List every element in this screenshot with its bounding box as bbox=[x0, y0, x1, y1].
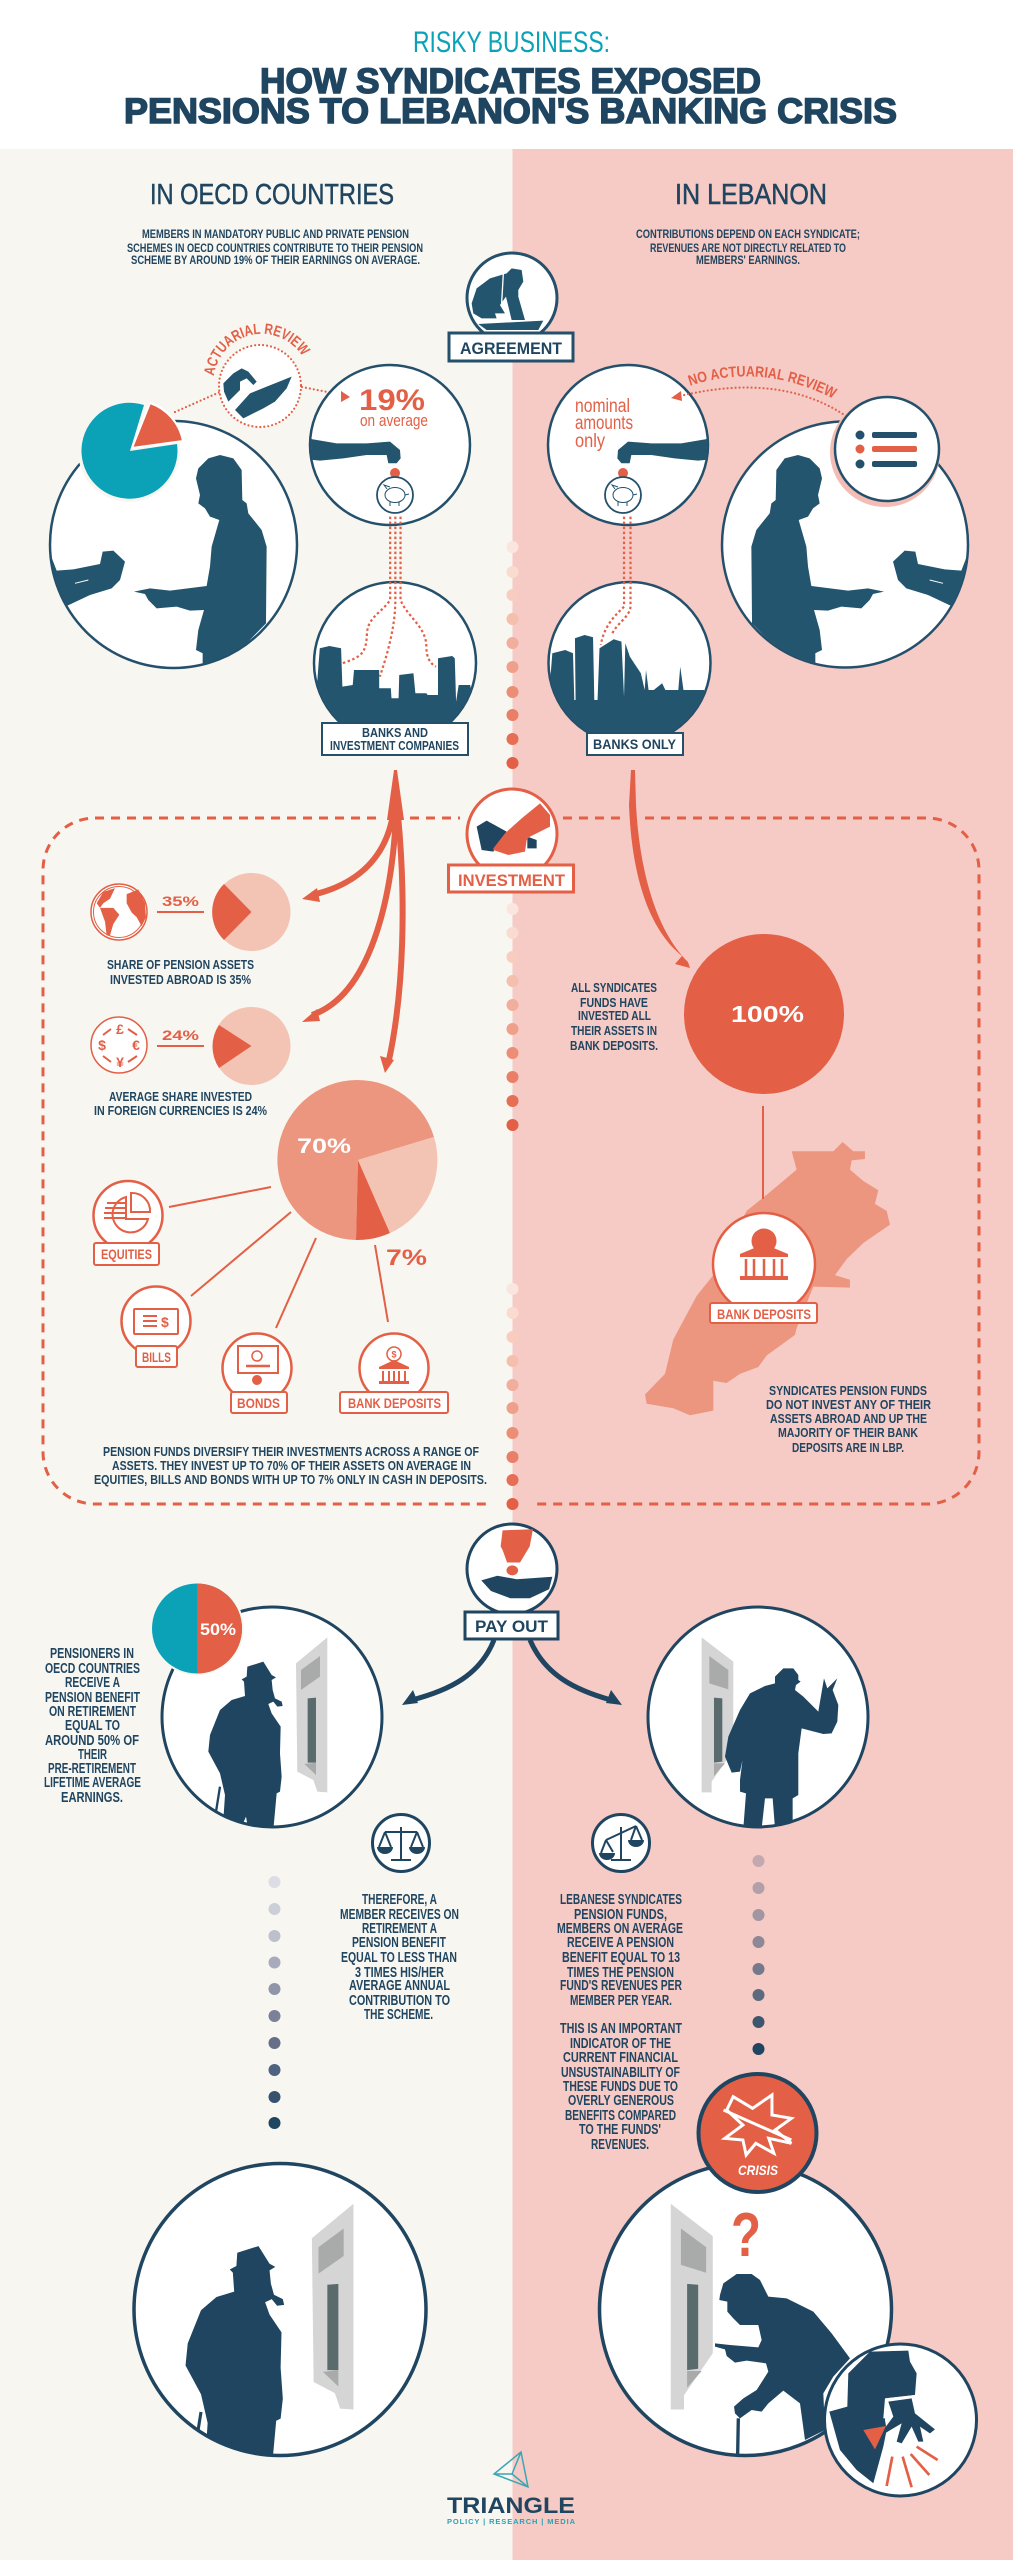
icon: crisis bbox=[698, 2074, 816, 2192]
chart: 100% circle: 100% bbox=[731, 1001, 804, 1027]
panel: OECD final pensioner bbox=[134, 2164, 426, 2469]
heading: in Lebanon: IN LEBANON bbox=[675, 179, 827, 211]
panel: nominal amounts circle: amounts bbox=[575, 413, 633, 434]
text: OECD pensioners bbox=[44, 1646, 141, 1806]
text: Lebanese syndicates: TO THE FUNDS' bbox=[579, 2122, 661, 2138]
text: Lebanese syndicates bbox=[557, 1892, 683, 2153]
panel: agreement badge bbox=[449, 253, 573, 361]
icon: globe bbox=[91, 884, 147, 940]
arrows: OECD investment flows bbox=[302, 770, 404, 1073]
text: Lebanese syndicates: UNSUSTAINABILITY OF bbox=[561, 2065, 680, 2081]
text: OECD contributions bbox=[127, 229, 423, 267]
icon: equities: EQUITIES bbox=[101, 1247, 152, 1262]
icon: empty wallet bbox=[824, 2344, 976, 2496]
logo: Triangle bbox=[447, 2452, 576, 2526]
arrow: Lebanon investment flow bbox=[629, 770, 690, 968]
text: Lebanese syndicates: MEMBERS ON AVERAGE bbox=[557, 1921, 683, 1937]
icon: checklist bbox=[830, 397, 940, 507]
panel: 19% contribution circle bbox=[307, 365, 470, 525]
chart: 50% pie bbox=[150, 1582, 244, 1676]
text: Lebanon contributions bbox=[636, 229, 860, 267]
heading: in OECD countries: IN OECD COUNTRIES bbox=[150, 179, 394, 211]
icon: bank deposits: BANK DEPOSITS bbox=[348, 1396, 441, 1411]
text: diversification: ASSETS. THEY INVEST UP TO 70% OF THEIR ASSETS ON AVERAGE IN bbox=[112, 1459, 471, 1473]
stat: 35% bbox=[157, 893, 204, 913]
text: OECD pensioners: RECEIVE A bbox=[65, 1675, 120, 1691]
title bbox=[124, 26, 897, 131]
text: Lebanese syndicates: REVENUES. bbox=[591, 2137, 649, 2153]
text: foreign currencies: AVERAGE SHARE INVESTED bbox=[109, 1090, 252, 1104]
text: OECD pensioners: OECD COUNTRIES bbox=[45, 1661, 140, 1677]
text: OECD pensioners: PENSION BENEFIT bbox=[45, 1690, 140, 1706]
icon: currencies: ¥ bbox=[116, 1054, 124, 1070]
panel: right person circle bbox=[722, 422, 971, 668]
icon: Lebanon bank deposits: BANK DEPOSITS bbox=[717, 1307, 811, 1322]
text: therefore: 3 TIMES HIS/HER bbox=[355, 1965, 444, 1981]
chart: 24% pie bbox=[212, 1007, 290, 1085]
title: HOW SYNDICATES EXPOSED bbox=[260, 62, 761, 101]
panel: banks and investment companies: BANKS AND bbox=[362, 725, 428, 740]
map: Lebanon bbox=[645, 1142, 890, 1415]
panel: actuarial review circle: ACTUARIAL REVIEW bbox=[204, 324, 311, 376]
panel: 19% contribution circle: 19% bbox=[359, 384, 425, 417]
stat: 24% bbox=[157, 1027, 204, 1047]
text: all syndicates: INVESTED ALL bbox=[578, 1009, 651, 1023]
text: OECD contributions: SCHEME BY AROUND 19% OF THEIR EARNINGS ON AVERAGE. bbox=[131, 255, 420, 267]
icon: bank deposits: $ bbox=[391, 1350, 397, 1360]
icon: currencies: £ bbox=[116, 1021, 124, 1037]
panel: nominal amounts circle: only bbox=[575, 431, 605, 452]
text: Lebanese syndicates: PENSION FUNDS, bbox=[574, 1907, 667, 1923]
text: OECD pensioners: AROUND 50% OF bbox=[45, 1733, 139, 1749]
text: Lebanon contributions: REVENUES ARE NOT DIRECTLY RELATED TO bbox=[650, 243, 846, 255]
text: Lebanese syndicates: RECEIVE A PENSION bbox=[567, 1935, 674, 1951]
title: PENSIONS TO LEBANON'S BANKING CRISIS bbox=[124, 92, 897, 131]
icon: currencies: € bbox=[132, 1037, 140, 1053]
panel: nominal amounts circle: nominal bbox=[575, 396, 630, 417]
text: syndicates pension funds: DO NOT INVEST ANY OF THEIR bbox=[766, 1398, 931, 1412]
text: OECD pensioners: THEIR bbox=[78, 1747, 107, 1763]
dots: Lebanon timeline bbox=[752, 1855, 764, 2055]
text: all syndicates: FUNDS HAVE bbox=[580, 996, 648, 1010]
text: Lebanese syndicates: CURRENT FINANCIAL bbox=[563, 2050, 678, 2066]
arrows: pay out bbox=[402, 1640, 622, 1705]
panel: investment badge bbox=[448, 789, 574, 892]
icon: Lebanon bank deposits bbox=[710, 1213, 817, 1323]
text: Lebanese syndicates: OVERLY GENEROUS bbox=[568, 2093, 674, 2109]
panel: actuarial review circle bbox=[174, 324, 330, 428]
text: share abroad: SHARE OF PENSION ASSETS bbox=[107, 958, 254, 972]
arrow: no actuarial review bbox=[671, 366, 844, 415]
text: therefore bbox=[340, 1892, 459, 2023]
text: OECD contributions: MEMBERS IN MANDATORY PUBLIC AND PRIVATE PENSION bbox=[142, 229, 409, 241]
panel: pay out badge bbox=[465, 1524, 558, 1639]
text: Lebanese syndicates: BENEFITS COMPARED bbox=[565, 2108, 676, 2124]
text: diversification bbox=[94, 1445, 487, 1487]
chart: 50% pie: 50% bbox=[200, 1620, 236, 1639]
text: Lebanon contributions: MEMBERS' EARNINGS. bbox=[696, 255, 800, 267]
text: foreign currencies: IN FOREIGN CURRENCIES IS 24% bbox=[94, 1104, 267, 1118]
panel: banks only bbox=[546, 517, 714, 755]
title: RISKY BUSINESS: bbox=[413, 26, 610, 59]
chart: actuarial pie bbox=[78, 400, 183, 502]
text: all syndicates: BANK DEPOSITS. bbox=[570, 1039, 658, 1053]
panel: banks only: BANKS ONLY bbox=[593, 736, 677, 752]
text: diversification: EQUITIES, BILLS AND BONDS WITH UP TO 7% ONLY IN CASH IN DEPOSITS. bbox=[94, 1473, 487, 1487]
panel: banks and investment companies bbox=[313, 517, 476, 755]
panel: investment badge: INVESTMENT bbox=[458, 871, 566, 890]
text: Lebanese syndicates: TIMES THE PENSION bbox=[567, 1965, 674, 1981]
icon: bills bbox=[122, 1286, 190, 1367]
text: therefore: MEMBER RECEIVES ON bbox=[340, 1907, 459, 1923]
panel: left person circle bbox=[47, 421, 297, 668]
text: Lebanese syndicates: BENEFIT EQUAL TO 13 bbox=[562, 1950, 680, 1966]
chart: OECD asset allocation pie: 70% bbox=[297, 1135, 351, 1158]
panel: Lebanon final pensioner: ? bbox=[731, 2201, 761, 2270]
icon: currencies bbox=[91, 1017, 147, 1073]
text: share abroad bbox=[107, 958, 254, 987]
chart: 35% pie bbox=[212, 873, 290, 951]
text: Lebanon contributions: CONTRIBUTIONS DEPEND ON EACH SYNDICATE; bbox=[636, 229, 860, 241]
text: Lebanese syndicates: INDICATOR OF THE bbox=[570, 2036, 671, 2052]
text: therefore: RETIREMENT A bbox=[362, 1921, 437, 1937]
icon: equities bbox=[94, 1181, 162, 1265]
text: Lebanese syndicates: THESE FUNDS DUE TO bbox=[563, 2079, 678, 2095]
icon: bills: $ bbox=[161, 1314, 169, 1330]
icon: bonds: BONDS bbox=[237, 1396, 280, 1411]
text: syndicates pension funds: DEPOSITS ARE IN LBP. bbox=[792, 1441, 904, 1455]
chart: OECD asset allocation pie bbox=[277, 1080, 437, 1270]
text: OECD contributions: SCHEMES IN OECD COUNTRIES CONTRIBUTE TO THEIR PENSION bbox=[127, 243, 423, 255]
text: therefore: PENSION BENEFIT bbox=[352, 1935, 446, 1951]
icon: crisis: CRISIS bbox=[738, 2162, 779, 2178]
logo: Triangle: TRIANGLE bbox=[447, 2493, 575, 2518]
text: Lebanese syndicates: FUND'S REVENUES PER bbox=[560, 1978, 682, 1994]
text: therefore: CONTRIBUTION TO bbox=[349, 1993, 450, 2009]
stat: 35%: 35% bbox=[162, 893, 200, 909]
center dots bbox=[506, 541, 518, 1510]
text: therefore: THE SCHEME. bbox=[364, 2007, 433, 2023]
icon: bank deposits bbox=[340, 1334, 448, 1413]
text: syndicates pension funds: ASSETS ABROAD AND UP THE bbox=[770, 1412, 927, 1426]
panel: 19% contribution circle: on average bbox=[360, 411, 428, 430]
text: all syndicates: THEIR ASSETS IN bbox=[571, 1024, 657, 1038]
connector lines bbox=[169, 1187, 388, 1328]
text: OECD pensioners: PENSIONERS IN bbox=[50, 1646, 134, 1662]
text: diversification: PENSION FUNDS DIVERSIFY THEIR INVESTMENTS ACROSS A RANGE OF bbox=[103, 1445, 479, 1459]
text: Lebanese syndicates: THIS IS AN IMPORTANT bbox=[560, 2021, 682, 2037]
text: syndicates pension funds: MAJORITY OF THEIR BANK bbox=[778, 1426, 918, 1440]
dots: OECD timeline bbox=[268, 1876, 280, 2129]
logo: Triangle: POLICY | RESEARCH | MEDIA bbox=[447, 2517, 576, 2526]
text: OECD pensioners: EQUAL TO bbox=[65, 1718, 120, 1734]
text: OECD pensioners: EARNINGS. bbox=[61, 1790, 123, 1806]
text: OECD pensioners: ON RETIREMENT bbox=[49, 1704, 136, 1720]
icon: tilted scales bbox=[592, 1814, 650, 1872]
text: OECD pensioners: LIFETIME AVERAGE bbox=[44, 1775, 141, 1791]
connector: 100% to bank deposits bbox=[762, 1106, 764, 1199]
panel: OECD pensioner bbox=[162, 1607, 382, 1830]
text: therefore: AVERAGE ANNUAL bbox=[349, 1978, 450, 1994]
icon: bonds bbox=[222, 1334, 292, 1413]
text: share abroad: INVESTED ABROAD IS 35% bbox=[110, 973, 251, 987]
text: Lebanese syndicates: MEMBER PER YEAR. bbox=[570, 1993, 672, 2009]
text: therefore: EQUAL TO LESS THAN bbox=[341, 1950, 457, 1966]
panel: banks and investment companies: INVESTMENT COMPANIES bbox=[330, 738, 459, 753]
dashed frame: investment bbox=[43, 818, 979, 1504]
text: syndicates pension funds bbox=[766, 1384, 931, 1455]
text: OECD pensioners: PRE-RETIREMENT bbox=[48, 1761, 136, 1777]
panel: Lebanon final pensioner bbox=[600, 2164, 892, 2456]
panel: Lebanon pensioner bbox=[648, 1607, 868, 1828]
icon: currencies: $ bbox=[98, 1037, 106, 1053]
text: therefore: THEREFORE, A bbox=[362, 1892, 437, 1908]
chart: OECD asset allocation pie: 7% bbox=[386, 1245, 427, 1270]
text: Lebanese syndicates: LEBANESE SYNDICATES bbox=[560, 1892, 682, 1908]
panel: nominal amounts circle bbox=[548, 365, 711, 525]
icon: bills: BILLS bbox=[142, 1350, 171, 1365]
chart: 100% circle bbox=[684, 934, 844, 1094]
panel: agreement badge: AGREEMENT bbox=[460, 339, 563, 358]
panel: pay out badge: PAY OUT bbox=[475, 1617, 549, 1636]
text: all syndicates bbox=[570, 981, 658, 1053]
text: syndicates pension funds: SYNDICATES PENSION FUNDS bbox=[769, 1384, 927, 1398]
text: foreign currencies bbox=[94, 1090, 267, 1118]
arrow: no actuarial review: NO ACTUARIAL REVIEW bbox=[688, 366, 838, 398]
icon: balanced scales bbox=[372, 1814, 430, 1872]
stat: 24%: 24% bbox=[162, 1027, 200, 1043]
text: all syndicates: ALL SYNDICATES bbox=[571, 981, 657, 995]
